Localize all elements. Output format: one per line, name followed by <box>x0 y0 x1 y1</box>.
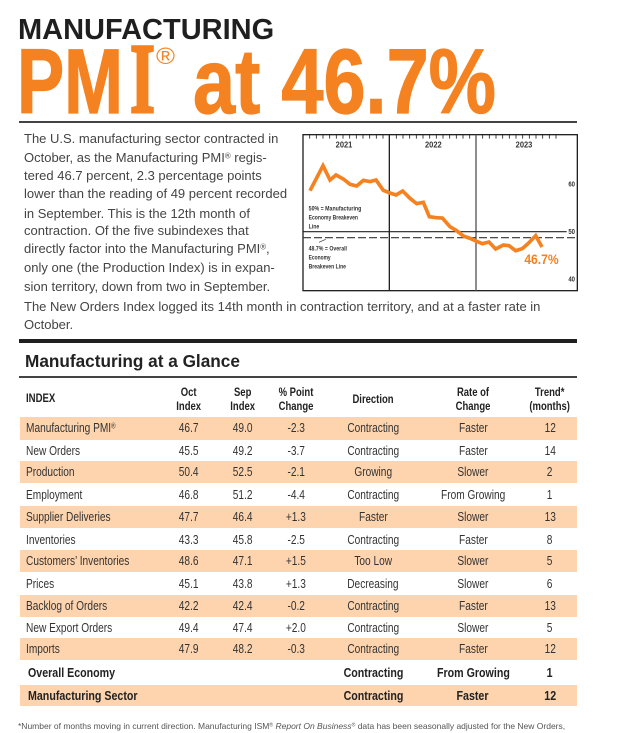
row: Customers' Inventories: +1.5 <box>286 553 306 568</box>
row: Customers' Inventories: 48.6 <box>179 553 199 568</box>
intro text block: The U.S. manufacturing sector contracted in <box>24 131 278 146</box>
row: Supplier Deliveries: +1.3 <box>286 509 306 524</box>
axis labels: 60 <box>568 181 575 188</box>
line annotation: 48.7% breakeven: Economy <box>309 256 331 262</box>
axis labels: 50 <box>568 229 575 236</box>
section rule <box>19 339 577 343</box>
row: Prices: 6 <box>547 576 553 591</box>
row: Manufacturing PMI: 49.0 <box>233 420 253 435</box>
table header: % Point <box>279 385 313 399</box>
row: Customers' Inventories: Customers’ Inventories <box>26 553 129 568</box>
footnote: *Number of months moving in current direction. Manufacturing ISM® Report On Business® data has been seasonally adjusted for the New Orders, <box>18 721 565 731</box>
row: Inventories: 45.8 <box>233 532 253 547</box>
intro text block: tered 46.7 percent, 2.3 percentage points <box>24 168 262 183</box>
data label: 46.7%: 46.7% <box>524 252 559 267</box>
row: Manufacturing Sector: Manufacturing Sector <box>28 688 138 703</box>
intro text block: sion territory, down from two in September. <box>24 279 270 294</box>
row: Employment: Contracting <box>347 487 399 502</box>
table header: Oct <box>181 385 197 399</box>
row: Inventories: 43.3 <box>179 532 199 547</box>
row: New Export Orders: +2.0 <box>286 620 306 635</box>
row: Overall Economy: Contracting <box>343 665 403 680</box>
row: Imports: Contracting <box>347 641 399 656</box>
row: New Orders: 45.5 <box>179 443 199 458</box>
line annotation: 48.7% breakeven <box>309 246 347 271</box>
axis labels <box>568 181 575 284</box>
row: Prices: 45.1 <box>179 576 199 591</box>
line annotation: 48.7% breakeven: Breakeven Line <box>309 265 347 271</box>
year labels: 2021 <box>336 140 352 150</box>
row: Imports: -0.3 <box>287 641 305 656</box>
row: Inventories: Inventories <box>26 532 76 547</box>
row: Supplier Deliveries: Slower <box>457 509 489 524</box>
row: Prices <box>26 576 553 591</box>
row: Imports: 47.9 <box>179 641 199 656</box>
row: Supplier Deliveries: 47.7 <box>179 509 199 524</box>
table header: Index <box>177 399 201 413</box>
row: Prices: Prices <box>26 576 54 591</box>
row: Prices: +1.3 <box>286 576 306 591</box>
table header: Sep <box>234 385 252 399</box>
row: Production <box>20 461 577 483</box>
row: Manufacturing PMI: 12 <box>544 420 556 435</box>
row: Employment: From Growing <box>441 487 505 502</box>
row: Supplier Deliveries: Supplier Deliveries <box>26 509 111 524</box>
row: Production: 52.5 <box>233 464 253 479</box>
row: Customers' Inventories: Too Low <box>354 553 392 568</box>
intro text block: only one (the Production Index) is in expan- <box>24 260 275 275</box>
row: Overall Economy: 1 <box>547 665 553 680</box>
row: Employment <box>26 487 553 502</box>
table: manufacturing at a glance <box>20 385 577 706</box>
table header: Change <box>279 399 313 413</box>
row: Backlog of Orders: -0.2 <box>287 598 305 613</box>
intro text block: October. <box>24 317 73 332</box>
row: Production: Slower <box>457 464 489 479</box>
row: Customers' Inventories: Slower <box>457 553 489 568</box>
row: Inventories <box>26 532 553 547</box>
PMI data line <box>310 166 542 251</box>
year labels <box>336 140 532 150</box>
row: Employment: -4.4 <box>287 487 305 502</box>
table header: Index <box>231 399 255 413</box>
row: New Orders: Faster <box>459 443 487 458</box>
row: Manufacturing Sector: Contracting <box>343 688 403 703</box>
row: Employment: Employment <box>26 487 82 502</box>
row: Customers' Inventories: 5 <box>547 553 553 568</box>
row: New Export Orders <box>26 620 553 635</box>
row: New Export Orders: Slower <box>457 620 489 635</box>
intro text block <box>24 131 540 332</box>
row: Inventories: -2.5 <box>287 532 305 547</box>
row: Customers' Inventories <box>20 550 577 572</box>
row: Manufacturing PMI: Faster <box>459 420 487 435</box>
axis labels: 40 <box>568 277 575 284</box>
row: New Export Orders: New Export Orders <box>26 620 112 635</box>
title: manufacturing: MANUFACTURING <box>18 14 274 46</box>
row: Inventories: Faster <box>459 532 487 547</box>
row: Employment: 46.8 <box>179 487 199 502</box>
intro text block: directly factor into the Manufacturing PMI®, <box>24 241 270 256</box>
row: Manufacturing PMI <box>20 417 577 440</box>
row: Manufacturing Sector <box>20 685 577 706</box>
table header: Change <box>456 399 490 413</box>
line annotation: 50% breakeven: Line <box>309 224 320 230</box>
row: Imports: 48.2 <box>233 641 253 656</box>
table heading: Manufacturing at a Glance <box>25 351 240 371</box>
intro text block: October, as the Manufacturing PMI® regis- <box>24 150 267 165</box>
heading rule <box>19 376 577 378</box>
row: Imports <box>20 638 577 660</box>
row: Overall Economy <box>28 665 553 680</box>
row: Customers' Inventories: 47.1 <box>233 553 253 568</box>
row: Production: 2 <box>547 464 553 479</box>
row: Manufacturing PMI: -2.3 <box>287 420 305 435</box>
line annotation: 50% breakeven: Economy Breakeven <box>309 216 358 222</box>
title: PMI at 46.7% <box>17 36 496 122</box>
row: New Export Orders: 47.4 <box>233 620 253 635</box>
row: New Orders: Contracting <box>347 443 399 458</box>
row: Supplier Deliveries: 46.4 <box>233 509 253 524</box>
row: Imports: Imports <box>26 641 60 656</box>
table header: (months) <box>530 399 570 413</box>
row: New Export Orders: Contracting <box>347 620 399 635</box>
row: Overall Economy: From Growing <box>437 665 509 680</box>
row: Production: -2.1 <box>287 464 305 479</box>
row: Production: 50.4 <box>179 464 199 479</box>
row: Manufacturing PMI: Contracting <box>347 420 399 435</box>
row: Employment: 1 <box>547 487 553 502</box>
row: Backlog of Orders: Backlog of Orders <box>26 598 107 613</box>
line chart: PMI 2021-2023 <box>302 134 578 292</box>
row: Inventories: 8 <box>547 532 553 547</box>
row: Backlog of Orders <box>20 595 577 617</box>
row: Production: Production <box>26 464 74 479</box>
row: Supplier Deliveries <box>20 506 577 528</box>
row: New Orders: -3.7 <box>287 443 305 458</box>
table header: Trend* <box>535 385 565 399</box>
row: Manufacturing PMI: Manufacturing PMI® <box>26 420 116 435</box>
row: Overall Economy: Overall Economy <box>28 665 115 680</box>
row: Manufacturing Sector: Faster <box>457 688 489 703</box>
row: Imports: 12 <box>544 641 556 656</box>
row: Backlog of Orders: Faster <box>459 598 487 613</box>
intro text block: lower than the reading of 49 percent recorded <box>24 186 287 201</box>
row: Prices: Slower <box>457 576 489 591</box>
row: Supplier Deliveries: Faster <box>359 509 387 524</box>
row: New Export Orders: 49.4 <box>179 620 199 635</box>
row: New Orders: New Orders <box>26 443 80 458</box>
table header <box>26 385 570 413</box>
row: Backlog of Orders: 42.4 <box>233 598 253 613</box>
intro text block: contraction. Of the five subindexes that <box>24 223 249 238</box>
row: Prices: Decreasing <box>347 576 399 591</box>
row: New Orders <box>26 443 556 458</box>
row: Manufacturing PMI: 46.7 <box>179 420 199 435</box>
row: Production: Growing <box>354 464 392 479</box>
row: Backlog of Orders: Contracting <box>347 598 399 613</box>
row: Supplier Deliveries: 13 <box>544 509 556 524</box>
row: New Orders: 14 <box>544 443 556 458</box>
row: Manufacturing Sector: 12 <box>544 688 556 703</box>
intro text block: The New Orders Index logged its 14th month in contraction territory, and at a faster rate in <box>24 299 540 314</box>
title: PMI at 46.7%: ® <box>156 43 175 69</box>
row: Imports: Faster <box>459 641 487 656</box>
intro text block: in September. This is the 12th month of <box>24 206 250 221</box>
table header: Direction <box>352 392 394 406</box>
row: Employment: 51.2 <box>233 487 253 502</box>
row: Backlog of Orders: 13 <box>544 598 556 613</box>
header rule <box>19 121 577 123</box>
row: Backlog of Orders: 42.2 <box>179 598 199 613</box>
row: Inventories: Contracting <box>347 532 399 547</box>
line annotation: 50% breakeven: 50% = Manufacturing <box>309 207 362 213</box>
year labels: 2022 <box>425 140 442 150</box>
row: New Export Orders: 5 <box>547 620 553 635</box>
row: New Orders: 49.2 <box>233 443 253 458</box>
row: Prices: 43.8 <box>233 576 253 591</box>
year labels: 2023 <box>516 140 532 150</box>
line annotation: 48.7% breakeven: 48.7% = Overall <box>309 246 347 252</box>
table header: INDEX <box>26 391 55 405</box>
line annotation: 50% breakeven <box>309 207 362 230</box>
table header: Rate of <box>457 385 489 399</box>
